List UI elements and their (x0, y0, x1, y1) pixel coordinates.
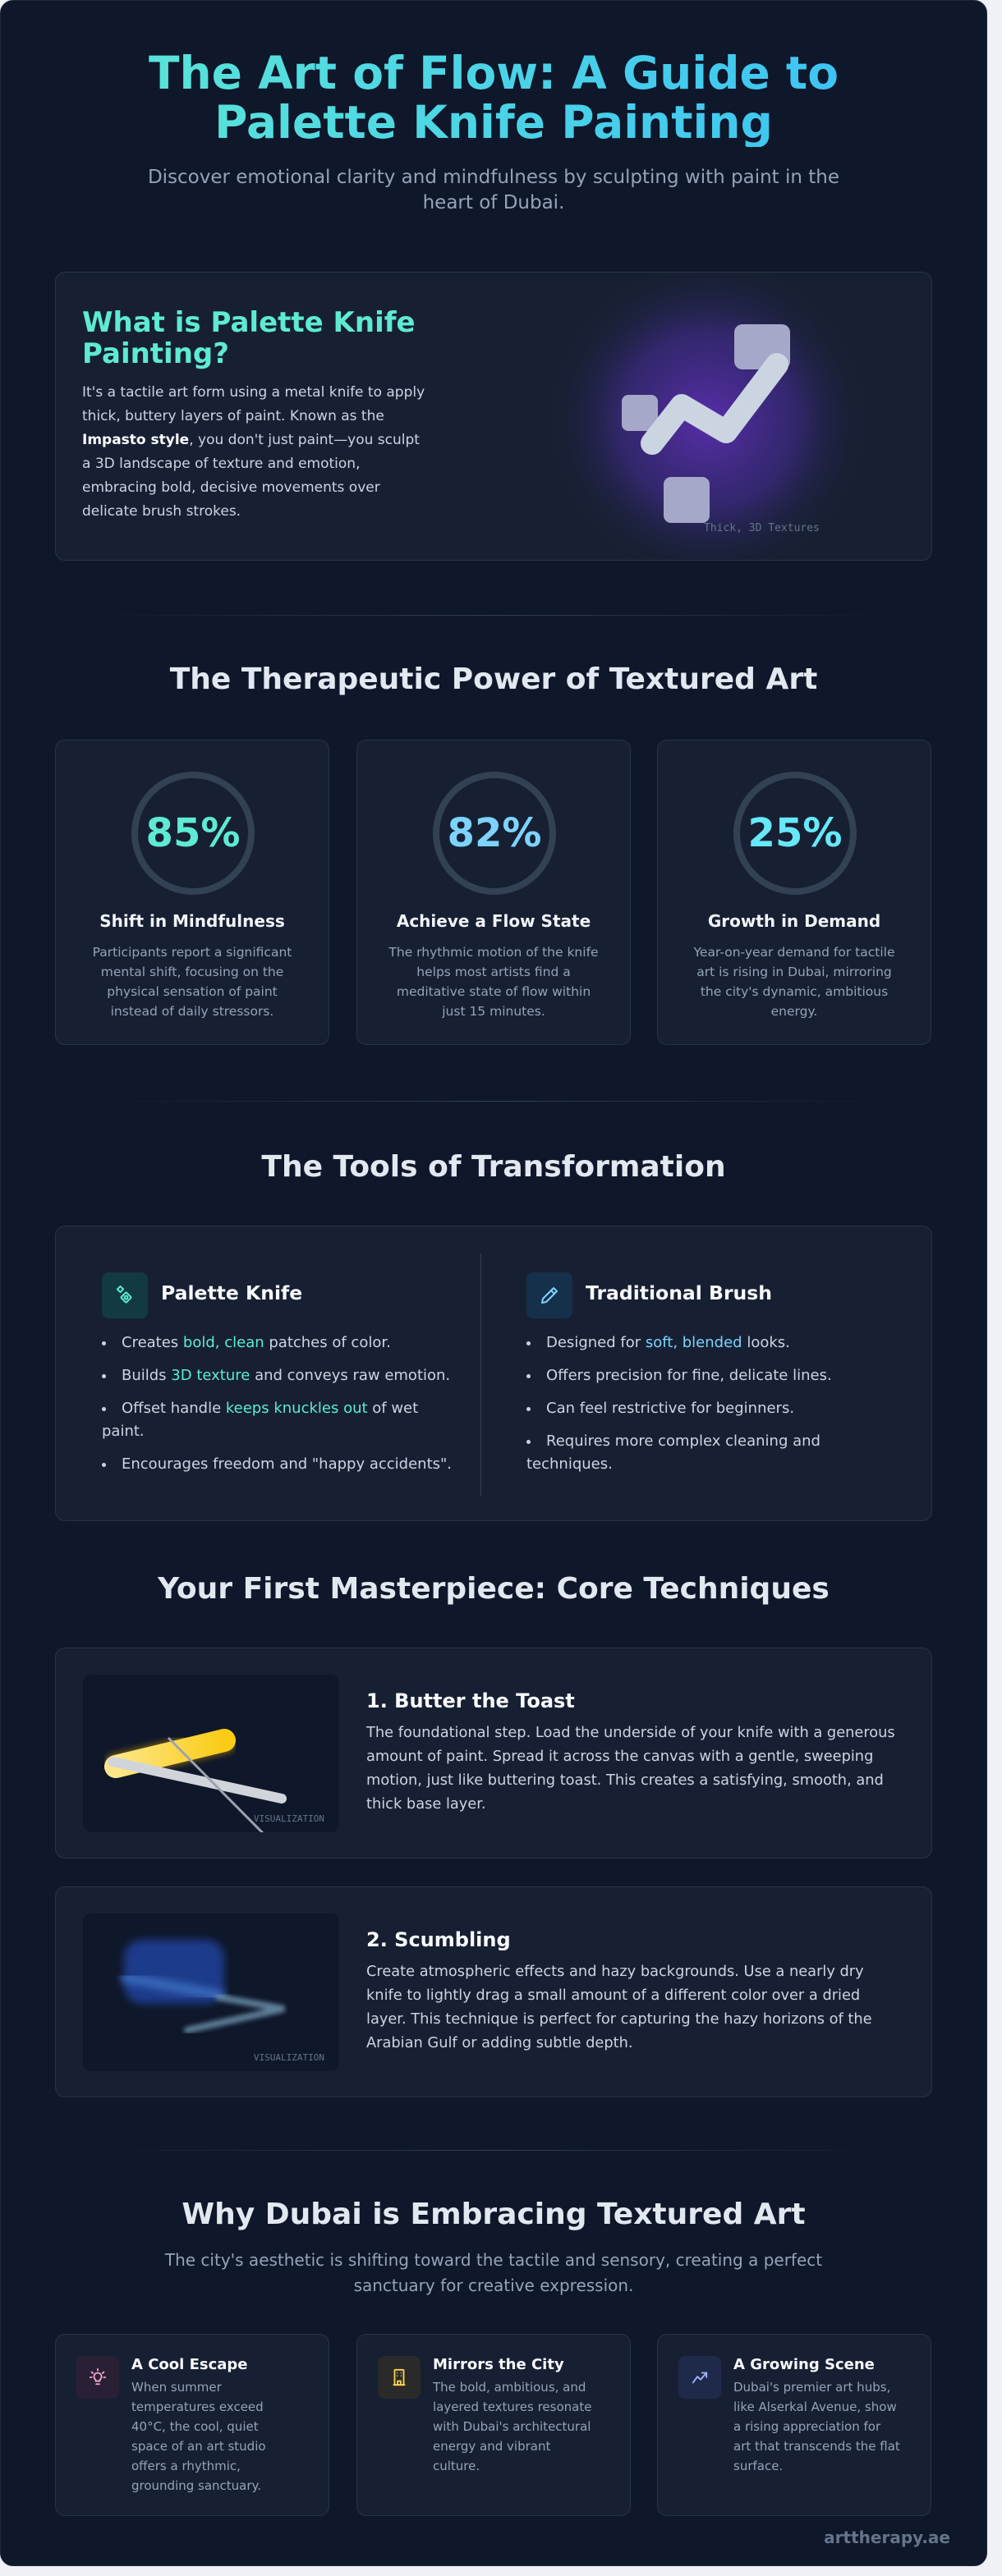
panel: mirrors the city: with Dubai's architectural (433, 2419, 591, 2434)
panel: stat 25: Growth in Demand (708, 911, 880, 931)
heading: techniques: Your First Masterpiece: Core Techniques (158, 1572, 830, 1606)
text block (82, 384, 425, 520)
list: palette knife: paint. (102, 1423, 145, 1440)
panel: growing scene: Dubai's premier art hubs, (733, 2380, 890, 2395)
heading: why dubai: Why Dubai is Embracing Textured Art (182, 2198, 806, 2231)
text block: a 3D landscape of texture and emotion, (82, 456, 360, 472)
panel: stat 25: Year-on-year demand for tactile art is rising in Dubai, mirroring the city's dynamic, ambitious energy. (694, 945, 894, 1019)
visualization: scumbling (83, 1914, 339, 2071)
heading: brush: Traditional Brush (586, 1281, 772, 1304)
icon: palette knife (102, 1272, 148, 1318)
panel: cool escape: space of an art studio (131, 2439, 266, 2454)
panel: stat 85: 85% (146, 810, 240, 856)
panel: technique 1 (55, 1648, 932, 1859)
panel: growing scene: surface. (733, 2459, 783, 2473)
list: palette knife (102, 1334, 452, 1473)
heading: therapeutic power: The Therapeutic Power of Textured Art (170, 662, 817, 696)
panel: growing scene: art that transcends the flat (733, 2439, 900, 2454)
panel: stat 82 (356, 740, 631, 1045)
panel: stat 25 (657, 740, 931, 1045)
panel: mirrors the city: energy and vibrant (433, 2439, 550, 2454)
panel: stat 82: 82% (448, 810, 541, 856)
panel: cool escape: offers a rhythmic, (131, 2459, 241, 2473)
panel: growing scene: a rising appreciation for (733, 2419, 880, 2434)
panel: stat 85 (55, 740, 329, 1045)
text block: delicate brush strokes. (82, 503, 241, 520)
text: The foundational step. Load the underside of your knife with a generous amount of paint. Spread it across the canvas with a gentle, sweeping motion, just like buttering toast. This creates a satisfying, smooth, and thick base layer. (366, 1724, 895, 1813)
panel: cool escape: When summer (131, 2380, 222, 2395)
title (1, 48, 986, 147)
list: palette knife: Offset handle keeps knuckles out of wet (122, 1400, 418, 1417)
heading: tools: The Tools of Transformation (261, 1150, 726, 1184)
list: palette knife: Builds 3D texture and conveys raw emotion. (122, 1367, 450, 1384)
icon: building (378, 2356, 421, 2399)
footer: brand: arttherapy.ae (824, 2528, 950, 2547)
panel: mirrors the city: layered textures resonate (433, 2400, 591, 2414)
panel: stat 25: 25% (748, 810, 842, 856)
panel: mirrors the city: The bold, ambitious, and (433, 2380, 586, 2395)
list: brush: Can feel restrictive for beginners. (546, 1400, 794, 1417)
list: brush: Requires more complex cleaning and (546, 1432, 820, 1450)
visualization: scumbling: VISUALIZATION (254, 2052, 324, 2063)
panel: cool escape: 40°C, the cool, quiet (131, 2419, 259, 2434)
panel: what is palette knife painting (55, 272, 932, 561)
list: brush: Offers precision for fine, delicate lines. (546, 1367, 832, 1384)
panel: cool escape: temperatures exceed (131, 2400, 264, 2414)
title: 1. Butter the Toast (366, 1689, 575, 1712)
list: brush (526, 1334, 832, 1473)
panel: stat 85: Shift in Mindfulness (99, 911, 285, 931)
panel: tools comparison (55, 1226, 932, 1521)
text block: thick, buttery layers of paint. Known as the (82, 408, 384, 424)
text block: Impasto style, you don't just paint—you sculpt (82, 432, 420, 448)
panel: mirrors the city: Mirrors the City (433, 2356, 564, 2373)
panel: stat 82: The rhythmic motion of the knife helps most artists find a meditative state of flow within just 15 minutes. (388, 945, 599, 1019)
panel: cool escape: A Cool Escape (131, 2356, 248, 2373)
text block: It's a tactile art form using a metal knife to apply (82, 384, 425, 401)
visualization: butter the toast: VISUALIZATION (254, 1813, 324, 1824)
icon: 3D textures illustration (575, 287, 841, 553)
heading: What is Palette Knife Painting? (82, 306, 416, 370)
icon: lightbulb (76, 2356, 119, 2399)
heading: palette knife: Palette Knife (161, 1281, 302, 1304)
panel: growing scene: A Growing Scene (733, 2356, 875, 2373)
title: 2. Scumbling (366, 1928, 511, 1951)
panel: cool escape: grounding sanctuary. (131, 2478, 261, 2493)
text block: embracing bold, decisive movements over (82, 479, 380, 496)
text: Create atmospheric effects and hazy backgrounds. Use a nearly dry knife to lightly drag a small amount of a different color over a dried layer. This technique is perfect for capturing the hazy horizons of the Arabian Gulf or adding subtle depth. (366, 1963, 872, 2051)
panel: stat 82: Achieve a Flow State (397, 911, 591, 931)
list: palette knife: Creates bold, clean patches of color. (122, 1334, 391, 1351)
list: brush: techniques. (526, 1455, 613, 1473)
panel: growing scene: like Alserkal Avenue, show (733, 2400, 897, 2414)
icon: 3D textures illustration: Thick, 3D Textures (704, 522, 820, 534)
list: brush: Designed for soft, blended looks. (546, 1334, 790, 1351)
visualization: butter the toast (83, 1675, 339, 1832)
subtitle: why dubai: The city's aesthetic is shifting toward the tactile and sensory, creating a perfect sanctuary for creative expression. (165, 2250, 822, 2295)
icon: trending up (678, 2356, 721, 2399)
panel: stat 85: Participants report a significant mental shift, focusing on the physical sensation of paint instead of daily stressors. (93, 945, 292, 1019)
panel: growing scene (657, 2334, 931, 2516)
subtitle: Discover emotional clarity and mindfulness by sculpting with paint in the heart of Dubai. (148, 167, 839, 213)
panel: mirrors the city (356, 2334, 631, 2516)
icon: brush (526, 1272, 572, 1318)
list: palette knife: Encourages freedom and "happy accidents". (122, 1455, 452, 1473)
panel: mirrors the city: culture. (433, 2459, 480, 2473)
panel: cool escape (55, 2334, 329, 2516)
panel: technique 2 (55, 1886, 932, 2097)
